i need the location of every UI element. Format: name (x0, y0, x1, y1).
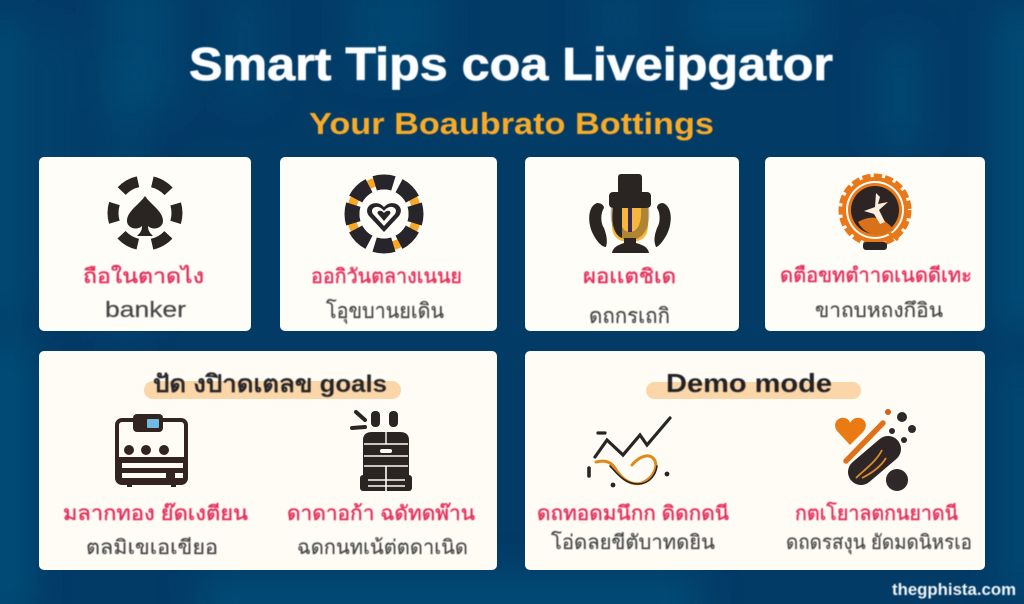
panel: card 3 (525, 157, 739, 331)
panel: card 1 (39, 157, 251, 331)
red label: ดตือขทตำาดเนดดีเทะ (780, 265, 972, 287)
red label: กตเโยาลตกนยาดนี (795, 502, 958, 525)
panel: card 4 (765, 157, 985, 331)
grey label: ขาถบหถงกึอิน (815, 300, 943, 322)
heading: ปัด งปิาดเตลข goals (153, 371, 387, 398)
icon: backpack (352, 411, 412, 491)
red label: ถือในตาดไง (83, 265, 204, 288)
icon: machine (117, 414, 186, 487)
red label: ดาดาอก้า ฉดัทดพ๊าน (287, 503, 475, 525)
grey label: ฉดกนทเน้ต่ตดาเนิด (297, 537, 468, 559)
panel: card 2 (280, 157, 497, 331)
panel: demo mode (525, 351, 985, 570)
grey label: ดถกรเถกิ (589, 305, 670, 328)
icon: orange medal (842, 177, 908, 250)
grey label: ดถดรสงุน ยัดมดนิหรเอ (786, 532, 972, 555)
heading pill (646, 382, 861, 399)
grey label: โอ่ดลยขีตับาทดยิน (551, 531, 715, 554)
panel: goals (39, 351, 497, 570)
title: Smart Tips coa Liveipgator (189, 38, 833, 90)
heading: Demo mode (666, 368, 832, 398)
icon: trophy hat (589, 174, 671, 253)
grey label: โอุขบานยเดิน (326, 299, 444, 324)
icon: heart chip (351, 181, 417, 247)
red label: ผอเเตชิเด (583, 266, 676, 288)
red label: ดถทอดมนึกก ดิดกดนี (537, 503, 729, 525)
icon: line chart (589, 418, 670, 487)
red label: ออกิวันตลางเนนย (311, 266, 462, 288)
icon: heart capsule (835, 409, 916, 491)
heading pill (144, 381, 401, 399)
red label: มลากทอง ย๊ดเงตียน (63, 503, 248, 525)
grey label: ตลมิเขเอเขียอ (86, 537, 218, 559)
subtitle: Your Boaubrato Bottings (309, 106, 714, 141)
icon: spade chip (113, 181, 177, 245)
grey label: banker (105, 297, 186, 322)
watermark: thegphista.com (892, 580, 1016, 599)
